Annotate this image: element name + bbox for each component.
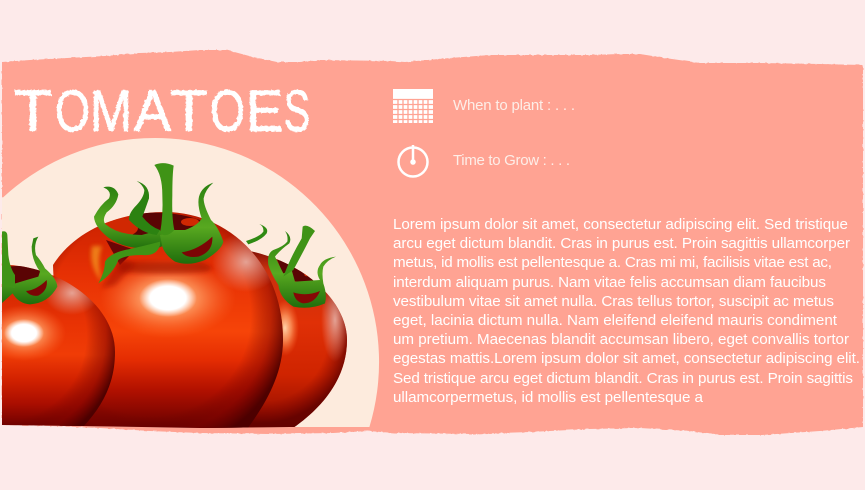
calyx: left tomato	[2, 231, 57, 304]
body paragraph: arcu eget dictum blandit. Cras in purus est. Proin sagittis ullamcorper	[393, 235, 850, 252]
body paragraph: egestas mattis.Lorem ipsum dolor sit amet, consectetur adipiscing elit.	[393, 350, 860, 367]
label: when to plant: When to plant : . . .	[453, 97, 575, 114]
body paragraph	[393, 216, 860, 406]
label: time to grow: Time to Grow : . . .	[453, 152, 570, 169]
body paragraph: vestibulum vitae sit amet nulla. Cras tellus tortor, suscipit ac metus	[393, 293, 834, 310]
title: A	[134, 79, 171, 144]
body paragraph: Lorem ipsum dolor sit amet, consectetur adipiscing elit. Sed tristique	[393, 216, 848, 233]
tomato: center	[53, 163, 283, 428]
icon: clock	[398, 145, 428, 176]
body paragraph: interdum aliquam purus. Nam vitae felis accumsan diam faucibus	[393, 274, 826, 291]
icon: calendar	[393, 89, 433, 123]
body paragraph: um pretium. Maecenas blandit accumsan libero, eget convallis tortor	[393, 331, 849, 348]
title: O	[210, 79, 245, 144]
title: S	[284, 79, 310, 144]
body paragraph: ullamcorpermetus, id mollis est pellentesque a	[393, 389, 704, 406]
body paragraph: eget, lacinia dictum nulla. Nam eleifend eleifend mauris condiment	[393, 312, 838, 329]
body paragraph: metus, id mollis est pellentesque a. Cras mi mi, facilisis vitae est ac,	[393, 254, 832, 271]
tomato: left	[0, 231, 120, 435]
title: E	[246, 79, 283, 144]
calyx: center tomato	[94, 163, 223, 283]
title: T	[170, 79, 208, 144]
calyx: right tomato	[246, 224, 336, 308]
torn salmon band	[2, 50, 863, 435]
tomato: right	[200, 224, 350, 435]
title: M	[90, 79, 132, 144]
title: O	[55, 79, 90, 144]
body paragraph: Sed tristique arcu eget dictum blandit. Cras in purus est. Proin sagittis	[393, 370, 853, 387]
title: T	[14, 79, 52, 144]
pale circle behind tomatoes	[2, 138, 379, 428]
illustration: three tomatoes	[0, 163, 350, 435]
